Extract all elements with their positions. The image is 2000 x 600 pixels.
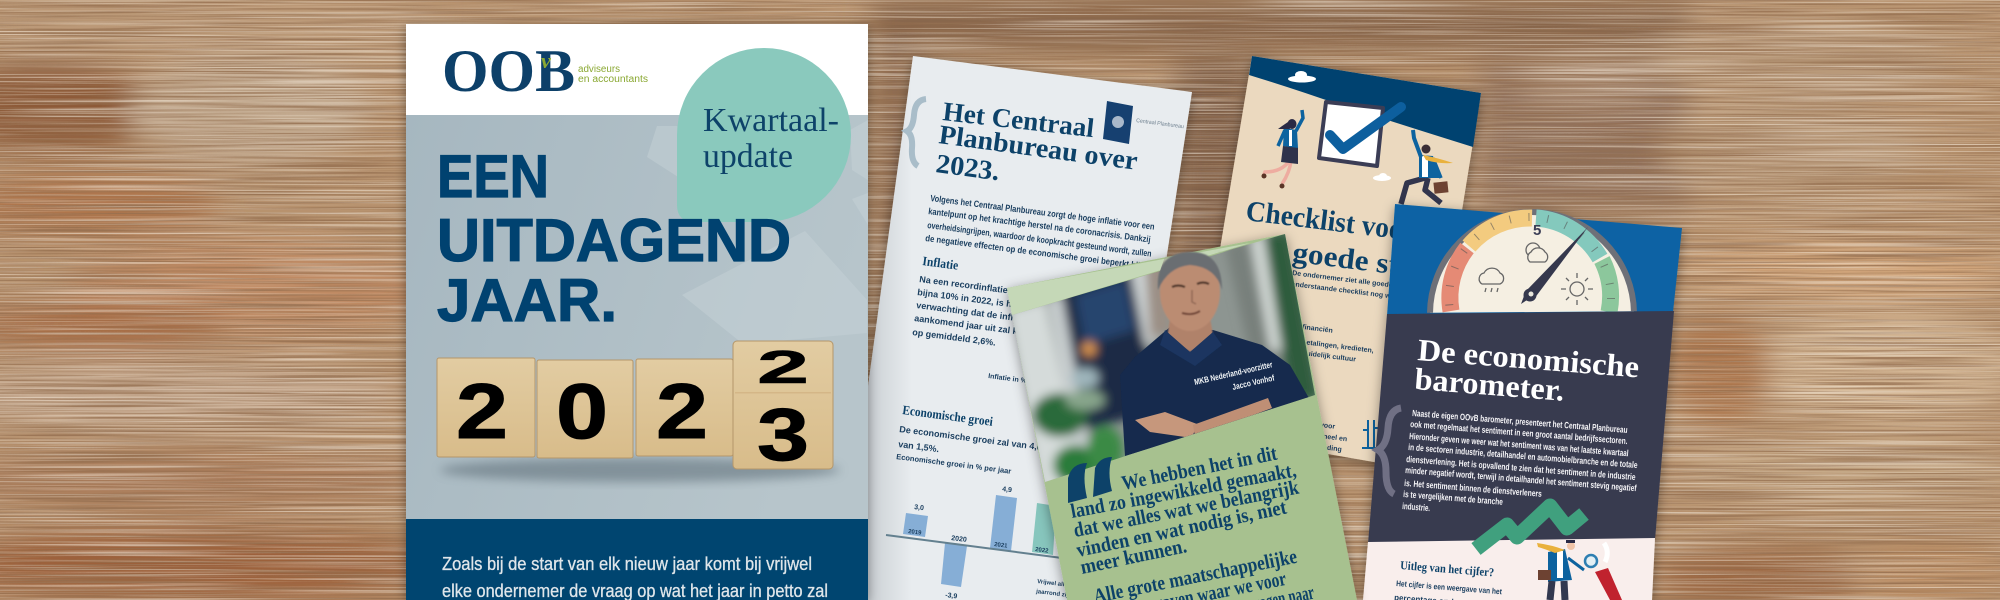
text block: introduction: de negatieve effecten op de economische groei beperkt blijven [925,233,1156,272]
badge: Kwartaal-update [677,48,851,222]
text block: inflatie: op gemiddeld 2,6%. [912,327,996,348]
light top strip [1007,243,1250,315]
person: shirt [1120,327,1310,456]
text block: checklist intro: betalingen, kredieten, [1302,339,1374,355]
text block: checklist intro [1291,270,1436,454]
dark body panel [1368,311,1674,544]
blocks: 2023: 3 [757,393,809,476]
shirt caption: MKB Nederland-voorzitter [1193,359,1274,387]
logo: OOvB: en accountants [578,74,648,85]
bar chart: economische groei: 2021 [994,542,1008,550]
header band [1387,204,1682,316]
icon: checkbox with check mark [1319,102,1401,166]
logo: OOvB [442,38,648,104]
header band [1249,56,1481,147]
card: man with quote [1007,230,1357,600]
heading: Inflatie: Inflatie [922,253,959,273]
cover image area [406,115,868,519]
blocks: 2023 [437,341,833,476]
icon: curly brace [1378,408,1401,494]
text block: intro [442,553,828,600]
bar chart: economische groei: 4,9 [1002,486,1012,494]
decorative light shapes [647,120,868,344]
icon: clouds [1288,71,1391,181]
document: economische barometer [1360,204,1682,600]
logo: Rijksoverheid: Centraal Planbureau [1136,118,1184,130]
text block: barometer body: is. Het sentiment binnen de dienstverleners [1404,478,1542,499]
heading: Checklist voor een goede start [1238,195,1441,286]
text block: checklist intro: onderstaande checklist nog wel eens [1291,281,1414,303]
text block: economische groei [896,424,1066,476]
heading: Het Centraal Planbureau over 2023: 2023. [934,148,1002,186]
bar chart: economische groei [886,486,1072,600]
blocks: 2023: 0 [556,368,608,455]
band: intro [406,519,868,600]
text block: barometer body: ook met regelmaat het sentiment in een groot aantal bedrijfssectoren. [1410,419,1628,446]
photo: portrait [1008,230,1320,490]
badge: Kwartaal-update: update [703,138,793,175]
arrow: red downward [1595,543,1622,600]
person: head [1158,252,1222,352]
document: checklist [1190,56,1481,470]
text block: inflatie: bijna 10% in 2022, is het de [917,287,1033,312]
bar chart: economische groei: 2022 [1035,547,1049,555]
text block: barometer body: industrie. [1402,501,1431,513]
text block: economische groei: De economische groei zal van 4,6% ten [899,424,1066,455]
text block: inflatie: aankomend jaar uit zal komen [914,313,1042,339]
text block: barometer body: Naast de eigen OOvB barometer, presenteert het Centraal Planbureau [1412,408,1628,435]
blocks: 2023: 2 [757,341,809,393]
title: Een uitdagend jaar: UITDAGEND [437,207,791,274]
icon: rain cloud [1479,268,1504,292]
illustration: running man [1401,130,1453,204]
text block: inflatie [912,274,1042,385]
person: collar [1160,330,1222,366]
heading: Checklist voor een goede start: een goede start [1238,230,1441,286]
text block: inflatie: Na een recordinflatie van [919,274,1026,298]
text block: uitleg: Het cijfer is een weergave van het [1396,579,1502,596]
heading: Economische groei: Economische groei [902,402,994,429]
heading: Het Centraal Planbureau over 2023: Het Centraal [941,96,1096,143]
heading: De economische barometer: barometer. [1413,361,1566,408]
text block: quote: dat we alles wat we belangrijk [1072,477,1301,542]
text block: barometer body [1402,408,1638,513]
text block: quote: meer kunnen. [1079,535,1189,579]
heading: Het Centraal Planbureau over 2023 [934,96,1139,186]
text block: barometer body: Hieronder geven we weer wat het sentiment was van het laatste kwartaal [1409,431,1629,458]
text block: introduction [925,193,1156,272]
icon: curly brace [907,99,926,166]
badge: Kwartaal-update: Kwartaal- [703,102,839,139]
arrow: green upward zigzag [1476,506,1584,549]
shirt caption [1194,362,1274,390]
bar chart: economische groei: 2020 [951,535,967,544]
gauge [1427,205,1637,313]
bar chart: economische groei: jaarrond zijn [1035,589,1072,599]
text block: checklist intro: personeel en [1304,431,1347,443]
needle [1521,227,1588,304]
illustration: man with magnifier [1537,540,1597,600]
title: Een uitdagend jaar: JAAR. [437,267,617,334]
text block: checklist intro: Oog voor [1304,420,1336,431]
number: 5: 5 [1533,222,1541,239]
text block: inflatie: Inflatie in % [988,373,1028,385]
text block: quote [1069,443,1316,600]
text block: economische groei: van 1,5%. [898,439,940,454]
icon: small plant [1362,420,1380,448]
text block: barometer body: minder negatief wordt, terwijl in detailhandel het sentiment stevig negatief [1405,465,1638,493]
heading: Uitleg van het cijfer: Uitleg van het cijfer? [1400,558,1495,579]
text block: economische groei: Economische groei in % per jaar [896,452,1012,476]
text block: barometer body: is te vergelijken met de branche [1403,489,1503,507]
white header [406,24,868,115]
text block: quote: We hebben het in dit [1120,443,1279,495]
blocks shadow [440,458,840,482]
blocks: 2023: 2 [456,368,508,455]
document: Centraal Planbureau over 2023 [866,56,1192,600]
heading: Checklist voor een goede start: Checklist voor [1244,195,1417,248]
bar chart: economische groei: 2019 [908,529,922,537]
text block: barometer body: in de sectoren industrie, detailhandel en automobielbranche en de totale [1408,442,1638,470]
title: Een uitdagend jaar: EEN [437,143,549,210]
text block: quote: vinden en wat nodig is, niet [1075,497,1289,562]
illustration: jumping woman [1262,110,1303,188]
icon: sun [1561,273,1593,305]
text block: quote: land zo ingewikkeld gemaakt, [1069,460,1298,523]
text block: intro: Zoals bij de start van elk nieuw jaar komt bij vrijwel [442,553,812,574]
text block: introduction: overheidsingrijpen, waardoor de koopkracht gesteund wordt, zullen [927,220,1152,259]
logo: Rijksoverheid [1103,101,1184,144]
blocks: 2023: 2 [656,368,708,455]
logo: OOvB: OOB [442,38,575,104]
text block: checklist intro: De ondernemer ziet alle goede voornemens [1292,270,1436,295]
title: Een uitdagend jaar [437,143,791,334]
heading: De economische barometer [1413,332,1641,408]
text block: introduction: Volgens het Centraal Planbureau zorgt de hoge inflatie voor een [930,193,1155,232]
panel: main cover [406,24,868,600]
logo: OOvB: adviseurs [578,64,620,75]
text block: inflatie: verwachting dat de inflatie [916,300,1029,324]
shirt caption: Jacco Vonhof [1231,373,1275,392]
heading: Het Centraal Planbureau over 2023: Planbureau over [937,119,1139,176]
person: crossed arms [1135,398,1272,438]
text block: checklist intro: duidelijk cultuur [1302,350,1357,364]
bar chart: economische groei: 3,0 [914,504,924,512]
icon: quotation marks [1068,457,1112,503]
text block: checklist intro: vergoeding [1304,442,1342,454]
logo: OOvB: v [541,48,551,73]
text block: barometer body: dienstverlening. Het is opvallend te zien dat het sentiment in de industrie [1406,454,1636,482]
text block: introduction: kantelpunt op het krachtige herstel na de coronacrisis. Dankzij [928,206,1151,244]
pale lower panel [1360,535,1660,600]
text block: checklist intro: financiën [1302,324,1333,335]
heading: De economische barometer: De economische [1416,332,1641,384]
icon: sun behind cloud [1526,243,1548,262]
bar chart: economische groei: Vrijwel alle [1037,579,1069,589]
